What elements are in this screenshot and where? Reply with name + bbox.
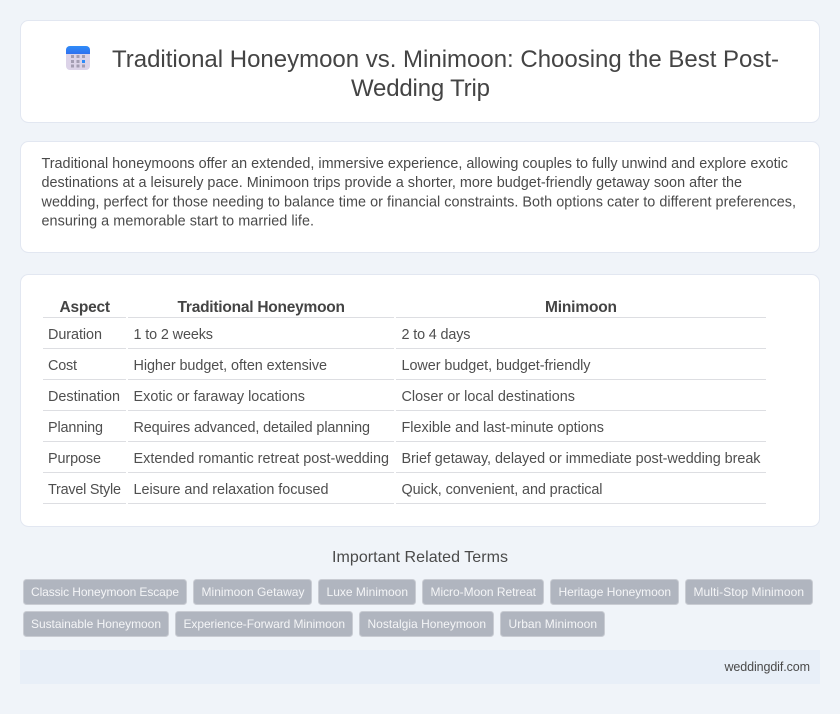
tag [176, 612, 352, 636]
tag: Heritage Honeymoon [558, 585, 671, 599]
table header row: Aspect [60, 299, 110, 316]
tag [550, 580, 678, 604]
row: planning [43, 420, 766, 442]
row: purpose: Extended romantic retreat post-wedding [134, 451, 389, 467]
title: Wedding Trip [351, 75, 490, 102]
tag: Minimoon Getaway [202, 585, 304, 599]
title [112, 46, 779, 102]
row: travel style: Quick, convenient, and practical [402, 482, 602, 498]
title: Traditional Honeymoon vs. Minimoon: Choosing the Best Post- [112, 46, 779, 73]
tag [194, 580, 312, 604]
tag [422, 580, 544, 604]
heading: related terms: Important Related Terms [332, 549, 508, 566]
tag [24, 580, 186, 604]
table header row [43, 299, 766, 318]
panel: header [20, 20, 820, 122]
tag [500, 612, 604, 636]
row: planning: Requires advanced, detailed planning [134, 420, 370, 436]
tags: related terms [24, 580, 812, 636]
tag: Multi-Stop Minimoon [694, 585, 804, 599]
row: duration [43, 327, 766, 349]
tag: Luxe Minimoon [326, 585, 408, 599]
row: cost: Higher budget, often extensive [134, 358, 327, 374]
tag [24, 612, 168, 636]
row: destination: Destination [48, 389, 120, 405]
text block: intro: ensuring a memorable start to married life. [42, 214, 314, 230]
tag [318, 580, 416, 604]
panel: comparison table [20, 274, 820, 526]
panel: intro paragraph [20, 142, 820, 252]
row: cost: Cost [48, 358, 77, 374]
text block: intro: wedding, perfect for those needing to balance time or financial constraints. Both options cater to different preferences, [40, 194, 796, 210]
row: travel style: Leisure and relaxation focused [134, 482, 328, 498]
tag: Sustainable Honeymoon [31, 617, 161, 631]
tag: Micro-Moon Retreat [430, 585, 537, 599]
row: duration: Duration [48, 327, 102, 343]
row: purpose [43, 451, 766, 473]
row: cost [43, 358, 766, 380]
row: travel style [43, 482, 766, 504]
row: duration: 1 to 2 weeks [134, 327, 213, 343]
text block: intro: Traditional honeymoons offer an extended, immersive experience, allowing couples to fully unwind and explore exotic [42, 156, 788, 172]
footer: weddingdif.com [724, 660, 810, 674]
row: destination: Exotic or faraway locations [134, 389, 305, 405]
row: destination [43, 389, 766, 411]
row: travel style: Travel Style [48, 482, 121, 498]
table header row: Traditional Honeymoon [178, 299, 345, 316]
tag: Nostalgia Honeymoon [368, 617, 486, 631]
text block: intro [40, 156, 796, 230]
row: purpose: Brief getaway, delayed or immediate post-wedding break [402, 451, 761, 467]
row: cost: Lower budget, budget-friendly [402, 358, 591, 374]
table header row: Minimoon [545, 299, 617, 316]
tag: Experience-Forward Minimoon [184, 617, 345, 631]
row: planning: Flexible and last-minute options [402, 420, 604, 436]
row: duration: 2 to 4 days [402, 327, 470, 343]
tag [686, 580, 812, 604]
footer [20, 650, 820, 684]
row: planning: Planning [48, 420, 103, 436]
tag: Urban Minimoon [508, 617, 597, 631]
text block: intro: destinations at a leisurely pace. Minimoon trips provide a shorter, more budget-friendly getaway soon after the [42, 175, 742, 191]
tag [360, 612, 494, 636]
row: destination: Closer or local destinations [402, 389, 575, 405]
tag: Classic Honeymoon Escape [31, 585, 179, 599]
icon: calendar [66, 46, 90, 70]
row: purpose: Purpose [48, 451, 101, 467]
